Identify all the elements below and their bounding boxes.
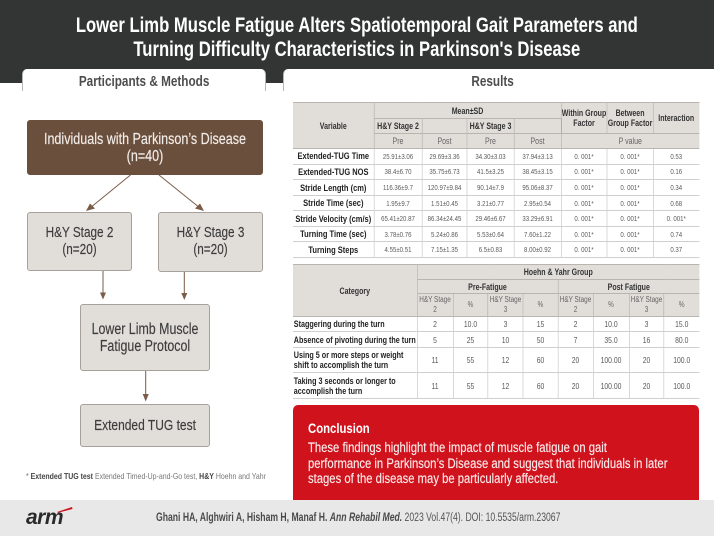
table: turning difficulty: 16	[643, 334, 650, 344]
table: spatiotemporal results: 6.5±0.83	[479, 245, 502, 254]
table: turning difficulty: 2	[433, 305, 437, 314]
table: turning difficulty: 20	[643, 380, 650, 390]
table: spatiotemporal results: 0. 001*	[620, 183, 640, 192]
table: turning difficulty: Using 5 or more steps or weight	[294, 350, 403, 360]
table: spatiotemporal results: Extended-TUG Time	[298, 150, 369, 161]
conclusion text: performance in Parkinson’s Disease and suggest that individuals in later	[308, 456, 667, 471]
table: spatiotemporal results: 0. 001*	[620, 230, 640, 239]
table: spatiotemporal results: 0.37	[670, 245, 682, 254]
box: Extended TUG test	[80, 404, 210, 447]
table: turning difficulty: H&Y Stage	[560, 295, 591, 304]
table: spatiotemporal results: 0. 001*	[574, 167, 594, 176]
table: spatiotemporal results: 0.74	[670, 230, 682, 239]
table: turning difficulty: 100.00	[601, 380, 621, 390]
table: spatiotemporal results: Stride Time (sec)	[303, 197, 363, 208]
table: turning difficulty: Hoehn & Yahr Group	[524, 267, 593, 277]
table: spatiotemporal results: 0.68	[670, 199, 682, 208]
table: spatiotemporal results: 38.4±6.70	[384, 167, 411, 176]
table: turning difficulty: %	[538, 300, 543, 309]
table: spatiotemporal results: Post	[530, 136, 545, 146]
table: turning difficulty: 3	[504, 305, 507, 314]
table: turning difficulty: Category	[340, 286, 370, 296]
table: turning difficulty: 60	[537, 355, 544, 365]
conclusion text	[308, 440, 668, 486]
table: turning difficulty: 100.0	[673, 355, 690, 365]
conclusion text: These findings highlight the impact of muscle fatigue on gait	[308, 440, 607, 455]
table: turning difficulty: 2	[433, 319, 437, 329]
tab: results	[283, 69, 714, 91]
table: spatiotemporal results: 0. 001*	[667, 214, 686, 223]
table: spatiotemporal results: Turning Steps	[308, 244, 358, 255]
table: turning difficulty: accomplish the turn	[294, 386, 362, 396]
table: spatiotemporal results: Stride Length (cm)	[300, 182, 366, 192]
table: spatiotemporal results: 120.97±9.84	[428, 183, 461, 192]
box: individuals with Parkinson's Disease: Individuals with Parkinson’s Disease	[44, 130, 246, 148]
box: individuals with Parkinson's Disease	[27, 120, 263, 175]
table: spatiotemporal results: Extended-TUG NOS	[298, 166, 369, 177]
table: turning difficulty: 2	[574, 305, 577, 314]
table: spatiotemporal results: 1.95±9.7	[386, 199, 410, 208]
table: spatiotemporal results: Between	[616, 108, 645, 118]
table: spatiotemporal results: 0. 001*	[620, 245, 640, 254]
table: spatiotemporal results: 33.29±6.91	[522, 214, 553, 223]
table: turning difficulty: %	[468, 300, 473, 309]
table: spatiotemporal results: 0.34	[670, 183, 682, 192]
title: Lower Limb Muscle Fatigue Alters Spatiotemporal Gait Parameters and	[76, 14, 638, 37]
table: spatiotemporal results: 0. 001*	[620, 167, 640, 176]
table: spatiotemporal results: 0. 001*	[574, 214, 594, 223]
table: turning difficulty: Pre-Fatigue	[468, 282, 507, 292]
table: turning difficulty: shift to accomplish the turn	[294, 360, 388, 370]
flow arrows	[86, 175, 204, 402]
table: turning difficulty: 2	[574, 319, 577, 329]
table: spatiotemporal results: 0.53	[670, 152, 682, 161]
tab: participants and methods	[22, 69, 266, 91]
table: spatiotemporal results: 2.95±0.54	[524, 199, 551, 208]
table: turning difficulty: 55	[467, 380, 474, 390]
box: H&Y stage 2: (n=20)	[62, 242, 97, 258]
table: turning difficulty: 15.0	[675, 319, 688, 329]
table: spatiotemporal results: Group Factor	[608, 118, 652, 128]
table: spatiotemporal results	[293, 102, 699, 258]
box: Extended TUG test: Extended TUG test	[94, 417, 196, 434]
table: spatiotemporal results: H&Y Stage 2	[377, 121, 419, 131]
table: turning difficulty: 10	[502, 334, 509, 344]
table: turning difficulty: 10.0	[604, 319, 618, 329]
conclusion heading: Conclusion	[308, 420, 370, 436]
box: fatigue protocol: Fatigue Protocol	[100, 338, 190, 354]
table: spatiotemporal results: 0. 001*	[574, 199, 594, 208]
table: turning difficulty: H&Y Stage	[490, 295, 521, 304]
table: spatiotemporal results: Mean±SD	[452, 106, 483, 116]
table: spatiotemporal results: 90.14±7.9	[477, 183, 504, 192]
box: H&Y stage 3: H&Y Stage 3	[177, 225, 244, 241]
table: turning difficulty	[293, 264, 699, 399]
table: spatiotemporal results: Pre	[393, 136, 403, 146]
table: spatiotemporal results: Stride Velocity (cm/s)	[295, 213, 371, 224]
table: turning difficulty: 10.0	[464, 319, 477, 329]
box: H&Y stage 3	[158, 212, 263, 272]
box: H&Y stage 3: (n=20)	[193, 242, 228, 258]
table: spatiotemporal results: 8.00±0.92	[524, 245, 551, 254]
table: spatiotemporal results: 29.46±6.67	[475, 214, 506, 223]
table: turning difficulty: 20	[643, 355, 650, 365]
table: turning difficulty: 12	[502, 380, 509, 390]
panel: conclusion	[293, 405, 699, 500]
logo: arm: arm	[26, 506, 63, 529]
table: spatiotemporal results: Interaction	[658, 113, 694, 123]
table: spatiotemporal results: 0. 001*	[574, 245, 594, 254]
box: fatigue protocol: Lower Limb Muscle	[92, 320, 198, 338]
table: spatiotemporal results: 7.15±1.35	[431, 245, 458, 254]
table: spatiotemporal results: 0. 001*	[574, 230, 594, 239]
table: spatiotemporal results: Variable	[320, 121, 347, 131]
table: spatiotemporal results: 0. 001*	[574, 152, 594, 161]
table: spatiotemporal results: 3.78±0.76	[384, 230, 411, 239]
table: turning difficulty: 11	[431, 355, 439, 365]
table: turning difficulty: %	[679, 300, 685, 309]
box: H&Y stage 2: H&Y Stage 2	[46, 224, 113, 240]
header band	[0, 0, 714, 83]
citation: Ghani HA, Alghwiri A, Hisham H, Manaf H. Ann Rehabil Med. 2023 Vol.47(4). DOI: 10.5535/arm.23067	[156, 512, 560, 524]
box: H&Y stage 2	[27, 212, 132, 271]
table: spatiotemporal results: 86.34±24.45	[428, 214, 461, 223]
tab: results: Results	[471, 74, 514, 90]
table: turning difficulty: %	[608, 300, 614, 309]
table: turning difficulty: 15	[537, 319, 544, 329]
table: turning difficulty: 20	[572, 355, 579, 365]
table: spatiotemporal results: P value	[619, 136, 642, 146]
table: spatiotemporal results: 5.24±0.86	[431, 230, 458, 239]
table: turning difficulty: 55	[467, 355, 474, 365]
table: turning difficulty: 100.00	[601, 355, 621, 365]
table: spatiotemporal results: 7.60±1.22	[524, 230, 551, 239]
table: turning difficulty: 35.0	[604, 334, 618, 344]
table: spatiotemporal results: 0. 001*	[620, 152, 640, 161]
table: spatiotemporal results: 1.51±0.45	[431, 199, 458, 208]
table: turning difficulty: H&Y Stage	[419, 295, 451, 304]
table: spatiotemporal results: 0. 001*	[620, 199, 640, 208]
table: turning difficulty: Absence of pivoting during the turn	[294, 334, 416, 344]
table: spatiotemporal results: Pre	[485, 136, 496, 146]
table: spatiotemporal results: Turning Time (sec)	[300, 228, 366, 239]
table: turning difficulty: Taking 3 seconds or longer to	[294, 376, 396, 386]
table: turning difficulty: 80.0	[675, 334, 688, 344]
table: turning difficulty: 5	[433, 334, 437, 344]
box: fatigue protocol	[80, 304, 210, 371]
table: turning difficulty: 7	[574, 334, 577, 344]
table: spatiotemporal results: 38.45±3.15	[522, 167, 553, 176]
table: spatiotemporal results: 116.36±9.7	[383, 183, 413, 192]
footer band	[0, 500, 714, 536]
table: turning difficulty: 12	[502, 355, 509, 365]
table: spatiotemporal results: 3.21±0.77	[477, 199, 504, 208]
box: individuals with Parkinson's Disease: (n=40)	[127, 148, 163, 164]
table: spatiotemporal results: Within Group	[562, 108, 606, 118]
table: turning difficulty: 50	[537, 334, 544, 344]
table: turning difficulty: 60	[537, 380, 544, 390]
table: spatiotemporal results: 65.41±20.87	[381, 214, 415, 223]
title	[76, 14, 638, 61]
tab: participants and methods: Participants & Methods	[79, 74, 209, 90]
table: spatiotemporal results: 29.69±3.36	[429, 152, 460, 161]
table: spatiotemporal results: Post	[437, 136, 452, 146]
table: spatiotemporal results: 25.91±3.06	[383, 152, 413, 161]
conclusion text: stages of the disease may be particularly affected.	[308, 471, 558, 486]
table: turning difficulty: 100.0	[673, 380, 690, 390]
table: turning difficulty: Post Fatigue	[608, 282, 650, 292]
table: spatiotemporal results: Factor	[573, 118, 595, 128]
table: turning difficulty: Staggering during the turn	[294, 319, 385, 329]
table: spatiotemporal results: 95.06±8.37	[522, 183, 553, 192]
table: spatiotemporal results: 0. 001*	[574, 183, 594, 192]
table: spatiotemporal results: H&Y Stage 3	[470, 121, 511, 131]
table: spatiotemporal results: 34.30±3.03	[475, 152, 506, 161]
table: turning difficulty: H&Y Stage	[631, 295, 662, 304]
table: turning difficulty: 3	[645, 319, 648, 329]
table: spatiotemporal results: 4.55±0.51	[384, 245, 411, 254]
table: turning difficulty: 3	[504, 319, 507, 329]
table: turning difficulty: 20	[572, 380, 579, 390]
table: spatiotemporal results: 5.53±0.64	[477, 230, 504, 239]
footnote: * Extended TUG test Extended Timed-Up-and-Go test, H&Y Hoehn and Yahr	[26, 471, 266, 481]
table: spatiotemporal results: 35.75±6.73	[429, 167, 460, 176]
table: turning difficulty: 25	[467, 334, 474, 344]
title: Turning Difficulty Characteristics in Parkinson's Disease	[133, 38, 580, 61]
table: spatiotemporal results: 0. 001*	[620, 214, 640, 223]
table: turning difficulty: 3	[645, 305, 648, 314]
table: turning difficulty: 11	[431, 380, 439, 390]
table: spatiotemporal results: 0.16	[670, 167, 682, 176]
table: spatiotemporal results: 41.5±3.25	[477, 167, 504, 176]
table: spatiotemporal results: 37.94±3.13	[522, 152, 553, 161]
